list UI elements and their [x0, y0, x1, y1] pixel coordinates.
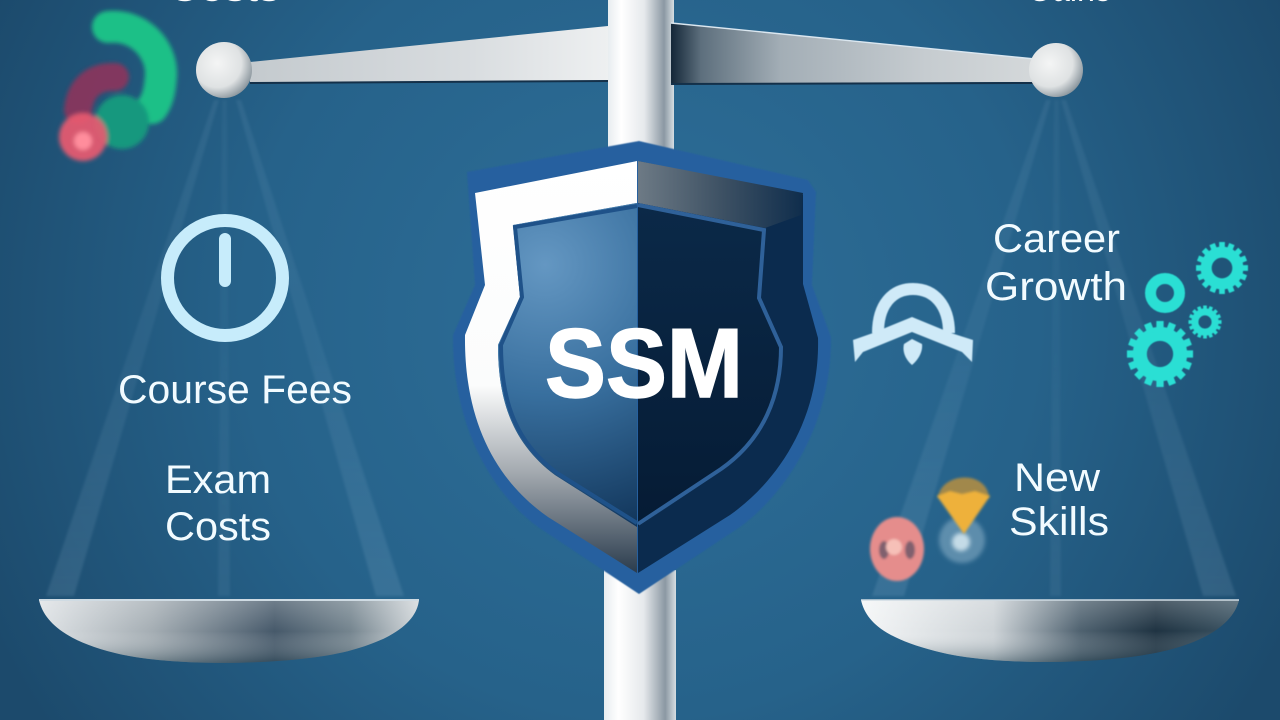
right pan: [861, 600, 1239, 662]
label: new skills: Skills: [1009, 500, 1109, 544]
label: course fees: Course Fees: [118, 368, 352, 412]
label: exam costs: Exam: [165, 458, 271, 502]
label: career growth: Growth: [985, 265, 1127, 309]
icon: clock: [168, 220, 282, 336]
SSM lettering: SSM: [545, 308, 743, 418]
icon: blurred pink badge: [870, 517, 924, 581]
icon: gears: [1127, 242, 1248, 387]
icon: blurred green and red arcs: [59, 27, 161, 161]
label: exam costs: Costs: [165, 505, 271, 549]
right pivot ball: [1029, 43, 1083, 97]
left beam: [250, 26, 608, 83]
label: new skills: New: [1014, 456, 1100, 500]
shield inner left face: [498, 203, 637, 527]
shield blue outer rim: [453, 141, 831, 594]
icon: graduation arch: [853, 289, 973, 365]
label: new skills: [1009, 456, 1109, 544]
scale post: [604, 0, 676, 720]
right beam: [671, 23, 1035, 84]
shield: [453, 141, 831, 594]
label: career growth: Career: [993, 217, 1120, 261]
shield right band: [638, 161, 818, 573]
shield left band: [465, 161, 637, 573]
left pivot ball: [196, 42, 252, 98]
label: career growth: [985, 217, 1127, 309]
right hanging chains: [872, 100, 1236, 596]
left hanging chains: [46, 100, 404, 596]
shield inner right face: [638, 203, 782, 527]
icon: blurred golden medal: [937, 477, 990, 563]
label: exam costs: [165, 458, 271, 549]
left pan: [39, 600, 419, 663]
